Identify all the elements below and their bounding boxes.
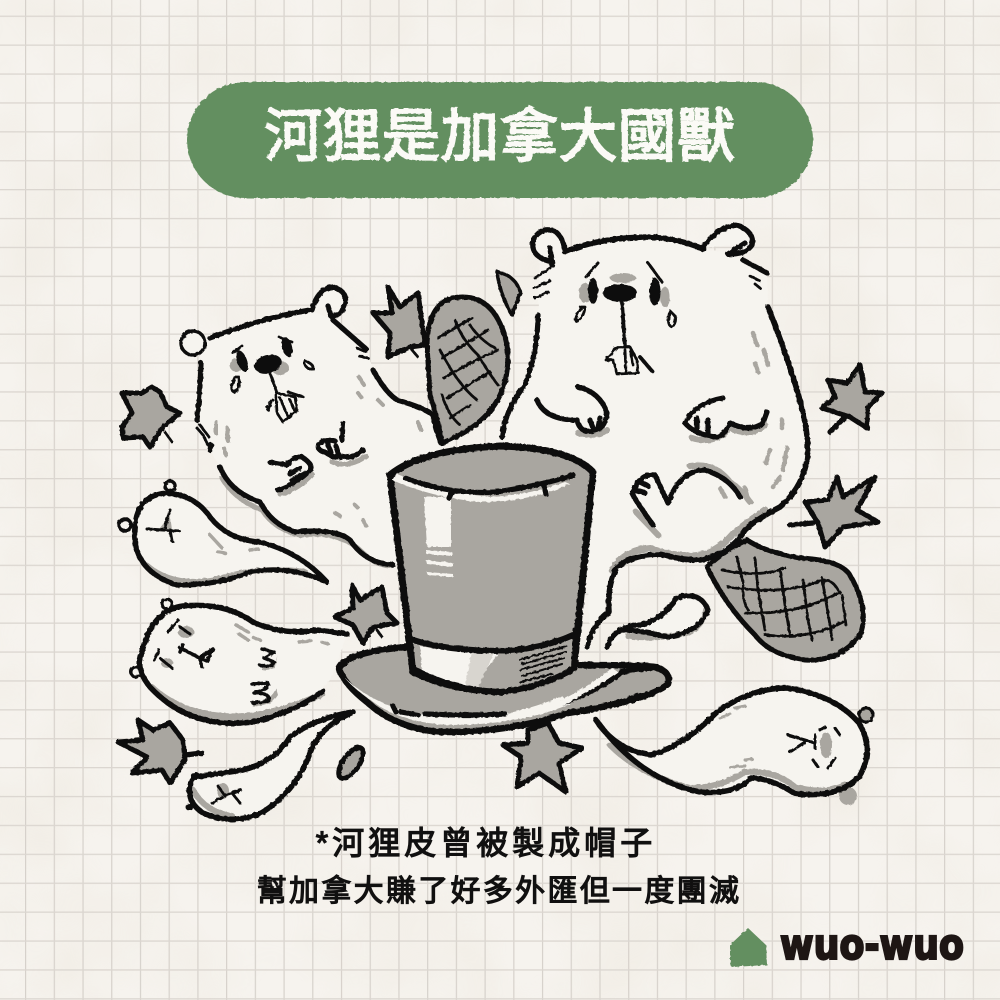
hat under-rim highlight bbox=[392, 474, 570, 502]
ghost 3 ears bbox=[192, 772, 200, 780]
left beaver fur marks bbox=[216, 377, 421, 526]
ghost 2 body bbox=[140, 605, 347, 723]
ghost beaver 4 bbox=[596, 688, 873, 805]
right beaver outline bbox=[565, 237, 808, 612]
maple leaf upper right bbox=[822, 365, 882, 432]
right beaver tail hatch bbox=[722, 557, 846, 640]
maple leaf upper middle bbox=[373, 287, 425, 357]
left beaver tail bbox=[427, 297, 508, 443]
ghost 3 body bbox=[190, 712, 353, 819]
ghost 2 ears bbox=[162, 599, 172, 609]
ghost beaver 3 bbox=[186, 712, 353, 819]
logo wordmark: wuo-wuo bbox=[780, 920, 964, 969]
right beaver face bbox=[576, 263, 676, 374]
left beaver belly shadow bbox=[222, 478, 390, 566]
ghost 1 face bbox=[160, 515, 172, 530]
footnote text bbox=[257, 825, 741, 908]
ghost 1 body bbox=[135, 493, 327, 585]
hat band bbox=[412, 636, 572, 690]
ghost beaver 2 bbox=[131, 599, 347, 723]
right beaver foot bbox=[636, 465, 750, 535]
top hat bbox=[339, 446, 669, 732]
left beaver tail hatch bbox=[438, 318, 498, 425]
title banner bbox=[187, 82, 813, 198]
right beaver leaf mark bbox=[497, 272, 521, 315]
bean shape bbox=[334, 744, 368, 782]
footnote line 2: 幫加拿大賺了好多外匯但一度團滅 bbox=[257, 875, 741, 908]
ghost 1 ears bbox=[165, 481, 175, 491]
left beaver left ear bbox=[181, 331, 205, 355]
left beaver hands bbox=[280, 456, 366, 494]
right beaver fur marks bbox=[720, 333, 787, 500]
left beaver face bbox=[230, 336, 313, 422]
ghost beaver 1 bbox=[119, 481, 327, 585]
hat crown bbox=[390, 446, 593, 692]
hat left highlight bbox=[424, 497, 453, 577]
hat band hatch bbox=[520, 646, 566, 682]
small tail wisp bbox=[607, 596, 708, 647]
ghost 4 ears bbox=[859, 708, 873, 722]
right beaver bbox=[497, 225, 863, 660]
title text: 河狸是加拿大國獸 bbox=[264, 104, 736, 169]
right beaver body fill bbox=[500, 237, 808, 630]
right beaver tail bbox=[707, 540, 863, 660]
hat brim white edge bbox=[345, 678, 570, 725]
ghost 2 face bbox=[178, 626, 194, 638]
left beaver bbox=[181, 287, 508, 566]
ghost 2 kiss marks bbox=[252, 655, 278, 706]
illustration bbox=[118, 225, 882, 819]
hat brim flap line bbox=[393, 668, 657, 715]
footnote line 1: *河狸皮曾被製成帽子 bbox=[316, 825, 656, 861]
star leaf under hat bbox=[503, 723, 582, 792]
left beaver body fill bbox=[198, 310, 450, 566]
maple leaf lower right bbox=[790, 477, 878, 547]
logo bbox=[730, 920, 964, 969]
right beaver shadow bbox=[612, 510, 765, 570]
hat top rim line bbox=[405, 475, 573, 498]
hat brim bbox=[339, 647, 669, 732]
right beaver arms bbox=[578, 425, 765, 440]
logo house icon bbox=[730, 928, 767, 967]
ghost 4 face bbox=[820, 732, 832, 758]
ghost 3 face bbox=[217, 783, 229, 799]
right beaver right ear bbox=[703, 225, 752, 254]
right beaver whiskers bbox=[534, 268, 760, 298]
left beaver outline bbox=[197, 310, 441, 565]
title pill bbox=[187, 82, 813, 198]
maple leaf bottom left bbox=[118, 720, 202, 783]
star leaf beside hat bbox=[335, 585, 397, 643]
hat band outline bbox=[409, 630, 576, 692]
maple leaf left bbox=[122, 387, 180, 447]
right beaver left ear bbox=[533, 230, 565, 265]
ghost 4 body bbox=[596, 688, 867, 795]
left beaver right ear bbox=[312, 287, 346, 316]
